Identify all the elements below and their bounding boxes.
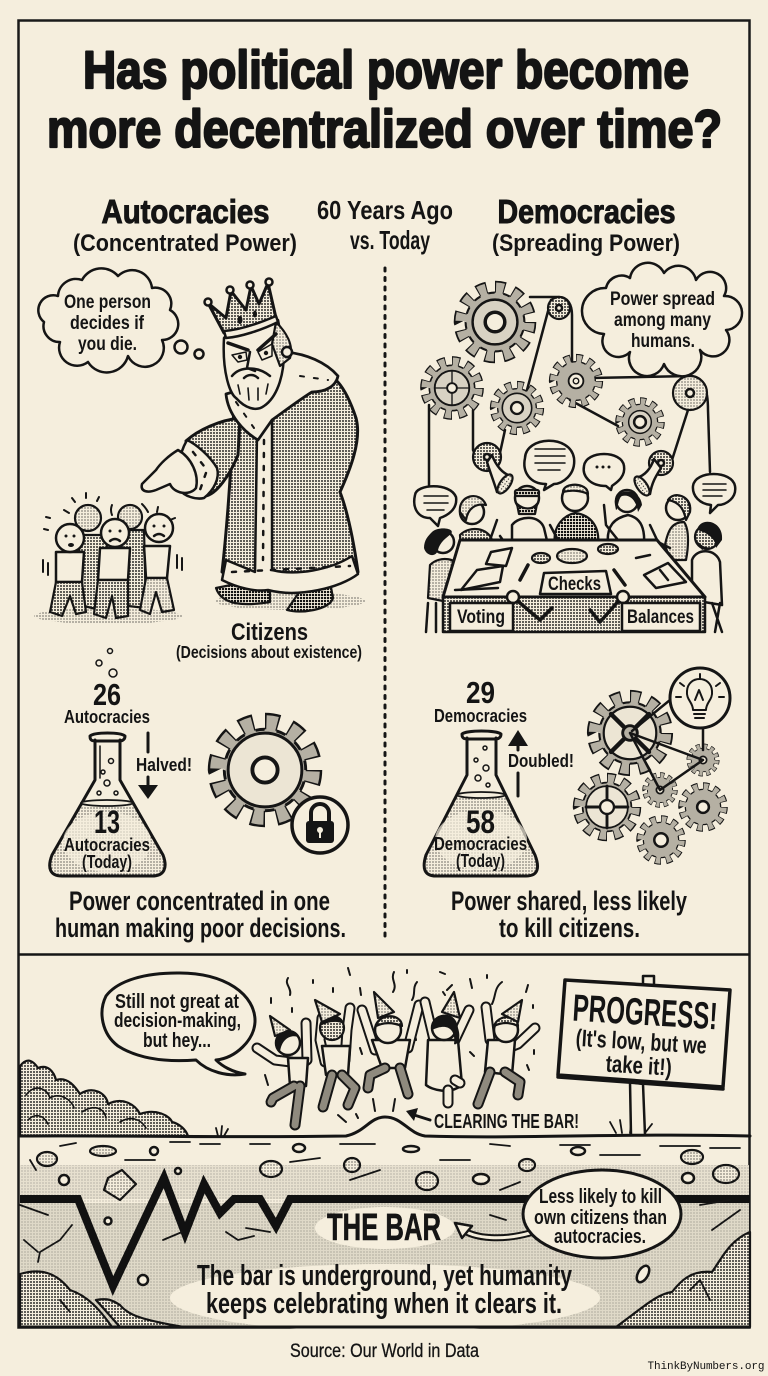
heading: time comparison: vs. Today <box>350 225 430 255</box>
jumper 1 <box>257 1016 308 1125</box>
the bar zigzag line <box>20 1178 750 1286</box>
king shoes <box>216 582 333 612</box>
thought bubble: one person decides <box>38 268 204 372</box>
autocracies statistics: 13 <box>94 804 120 840</box>
voting label: Voting <box>457 606 505 628</box>
rocks bottom left <box>20 1271 184 1327</box>
table front panel <box>443 597 705 632</box>
king robe <box>222 380 358 586</box>
confetti <box>265 968 534 1085</box>
fear marks <box>43 493 182 575</box>
gear lower <box>495 386 539 430</box>
thought bubble: one person decides: decides if <box>70 312 144 334</box>
democracies conclusion: to kill citizens. <box>499 913 640 943</box>
underground scene <box>20 1061 750 1332</box>
table stool legs <box>426 603 722 632</box>
rising bubbles <box>96 648 117 677</box>
heading: democracies <box>492 193 680 257</box>
dotted centre divider <box>384 268 386 938</box>
citizen front right <box>140 514 174 614</box>
autocracies statistics: Autocracies <box>64 706 150 727</box>
democracies statistics: Democracies <box>434 705 527 726</box>
autocracies statistics: 26 <box>93 677 121 712</box>
hill contour lines <box>26 1088 146 1128</box>
cracks <box>20 1200 740 1312</box>
text clearing patches <box>315 1207 455 1249</box>
arrow to the bar <box>455 1223 530 1238</box>
rocks bottom right <box>616 1232 750 1327</box>
gear left spoked <box>426 362 478 414</box>
speech bubble: still not great <box>102 973 255 1075</box>
table items <box>455 544 686 590</box>
jumper 3 <box>362 992 419 1094</box>
balances label: Balances <box>627 606 694 628</box>
bump motion marks <box>338 1099 395 1122</box>
citizens ground shadow <box>34 608 182 624</box>
bottom conclusion: The bar is underground, yet humanity <box>197 1260 572 1292</box>
gear large <box>461 288 529 356</box>
progress sign: (It's low, but we <box>575 1025 707 1060</box>
speech bubble: still not great: but hey... <box>143 1029 211 1052</box>
democracies statistics: 29 <box>466 675 495 710</box>
jumper 4 <box>425 992 469 1103</box>
jumper 5 <box>478 1000 535 1104</box>
citizen front left <box>50 524 86 616</box>
gear centre <box>554 359 598 403</box>
thought bubble: power spread: among many <box>614 309 711 331</box>
title <box>47 41 722 159</box>
citizens label: Citizens <box>231 619 308 646</box>
heading: autocracies: Autocracies <box>102 193 270 230</box>
title: Has political power become <box>83 41 689 100</box>
citizens label: (Decisions about existence) <box>176 642 362 662</box>
democracies statistics <box>424 675 574 876</box>
citizen back right <box>118 505 146 608</box>
speech bubble: less likely: Less likely to kill <box>539 1185 662 1208</box>
flask right <box>424 731 538 876</box>
autocracies conclusion: Power concentrated in one <box>69 886 330 916</box>
pulleys <box>473 297 707 475</box>
illustration: council at table <box>414 441 735 632</box>
citizens label <box>176 619 362 662</box>
robe fur trim <box>178 420 358 593</box>
balances label <box>622 603 700 631</box>
hill left <box>20 1061 188 1136</box>
autocracies statistics: Autocracies <box>64 834 150 855</box>
illustration: frightened citizens <box>34 493 182 624</box>
autocracies statistics: (Today) <box>82 852 132 872</box>
halved arrow <box>136 733 192 799</box>
speech bubble: still not great: decision-making, <box>114 1009 241 1032</box>
king pointing sleeve <box>186 418 240 496</box>
autocracies statistics <box>50 648 192 876</box>
autocracies conclusion <box>55 886 346 943</box>
speech bubbles over council <box>414 441 735 526</box>
progress sign: take it!) <box>605 1051 673 1082</box>
thought bubble: power spread: Power spread <box>610 288 715 310</box>
speech bubble: less likely <box>523 1170 681 1258</box>
soil layer upper <box>20 1165 749 1199</box>
fur collar and mantle <box>226 352 338 440</box>
citizen front centre <box>94 519 130 618</box>
democracies conclusion <box>451 886 687 943</box>
illustration: celebrating people <box>257 992 535 1125</box>
bottom conclusion <box>197 1260 572 1320</box>
king head and beard <box>224 320 292 409</box>
source: Source: Our World in Data <box>290 1340 479 1362</box>
drive belts <box>429 297 710 485</box>
heading: democracies: Democracies <box>498 193 676 230</box>
jumper 2 <box>315 1000 355 1107</box>
the bar label: THE BAR <box>327 1207 441 1249</box>
illustration: angry king pointing <box>142 278 365 612</box>
king pointing hand <box>142 450 197 493</box>
illustration: network of gears and belts <box>426 288 710 498</box>
bottom conclusion: keeps celebrating when it clears it. <box>206 1288 562 1320</box>
democracies statistics: 58 <box>466 804 495 840</box>
table top <box>443 540 705 597</box>
thought bubble: power spread <box>582 263 742 376</box>
council members <box>424 485 722 605</box>
mechanical arms <box>513 565 625 622</box>
icon: distributed gears with lightbulb <box>579 668 730 860</box>
crown <box>204 278 278 338</box>
heading: autocracies: (Concentrated Power) <box>73 230 297 257</box>
thought bubble: one person decides: One person <box>64 291 151 313</box>
clearing the bar label: CLEARING THE BAR! <box>434 1110 579 1133</box>
heading: time comparison <box>317 195 453 255</box>
checks label: Checks <box>548 573 601 595</box>
democracies statistics: (Today) <box>456 851 505 871</box>
heading: time comparison: 60 Years Ago <box>317 195 453 225</box>
watermark: ThinkByNumbers.org <box>648 1361 764 1373</box>
horizontal section divider <box>18 953 750 956</box>
flask left <box>50 733 165 876</box>
democracies statistics: Democracies <box>434 833 527 854</box>
soil specks <box>30 1142 740 1190</box>
democracies conclusion: Power shared, less likely <box>451 886 687 916</box>
voting label <box>450 603 513 631</box>
heading: autocracies <box>73 193 297 257</box>
gear right <box>620 402 660 442</box>
doubled arrow <box>508 730 574 796</box>
horns <box>487 455 661 498</box>
icon: gear locked with padlock <box>218 723 348 853</box>
heading: democracies: (Spreading Power) <box>492 230 680 257</box>
citizen back left <box>75 505 110 610</box>
halved arrow: Halved! <box>136 754 192 775</box>
arrow: clearing the bar <box>406 1108 430 1121</box>
thought bubble: power spread: humans. <box>631 330 695 352</box>
king shadow <box>215 592 365 610</box>
progress sign <box>558 976 730 1135</box>
doubled arrow: Doubled! <box>508 750 574 771</box>
speech bubble: still not great: Still not great at <box>115 990 239 1013</box>
autocracies conclusion: human making poor decisions. <box>55 913 346 943</box>
speech bubble: less likely: autocracies. <box>554 1225 646 1248</box>
thought bubble: one person decides: you die. <box>78 333 137 355</box>
frame bottom edge <box>18 1326 750 1328</box>
speech bubble: less likely: own citizens than <box>534 1206 667 1229</box>
ground line with bump <box>20 1117 750 1137</box>
grass tufts <box>216 1118 652 1136</box>
rocks <box>37 1144 739 1285</box>
soil layer lower <box>20 1203 749 1327</box>
